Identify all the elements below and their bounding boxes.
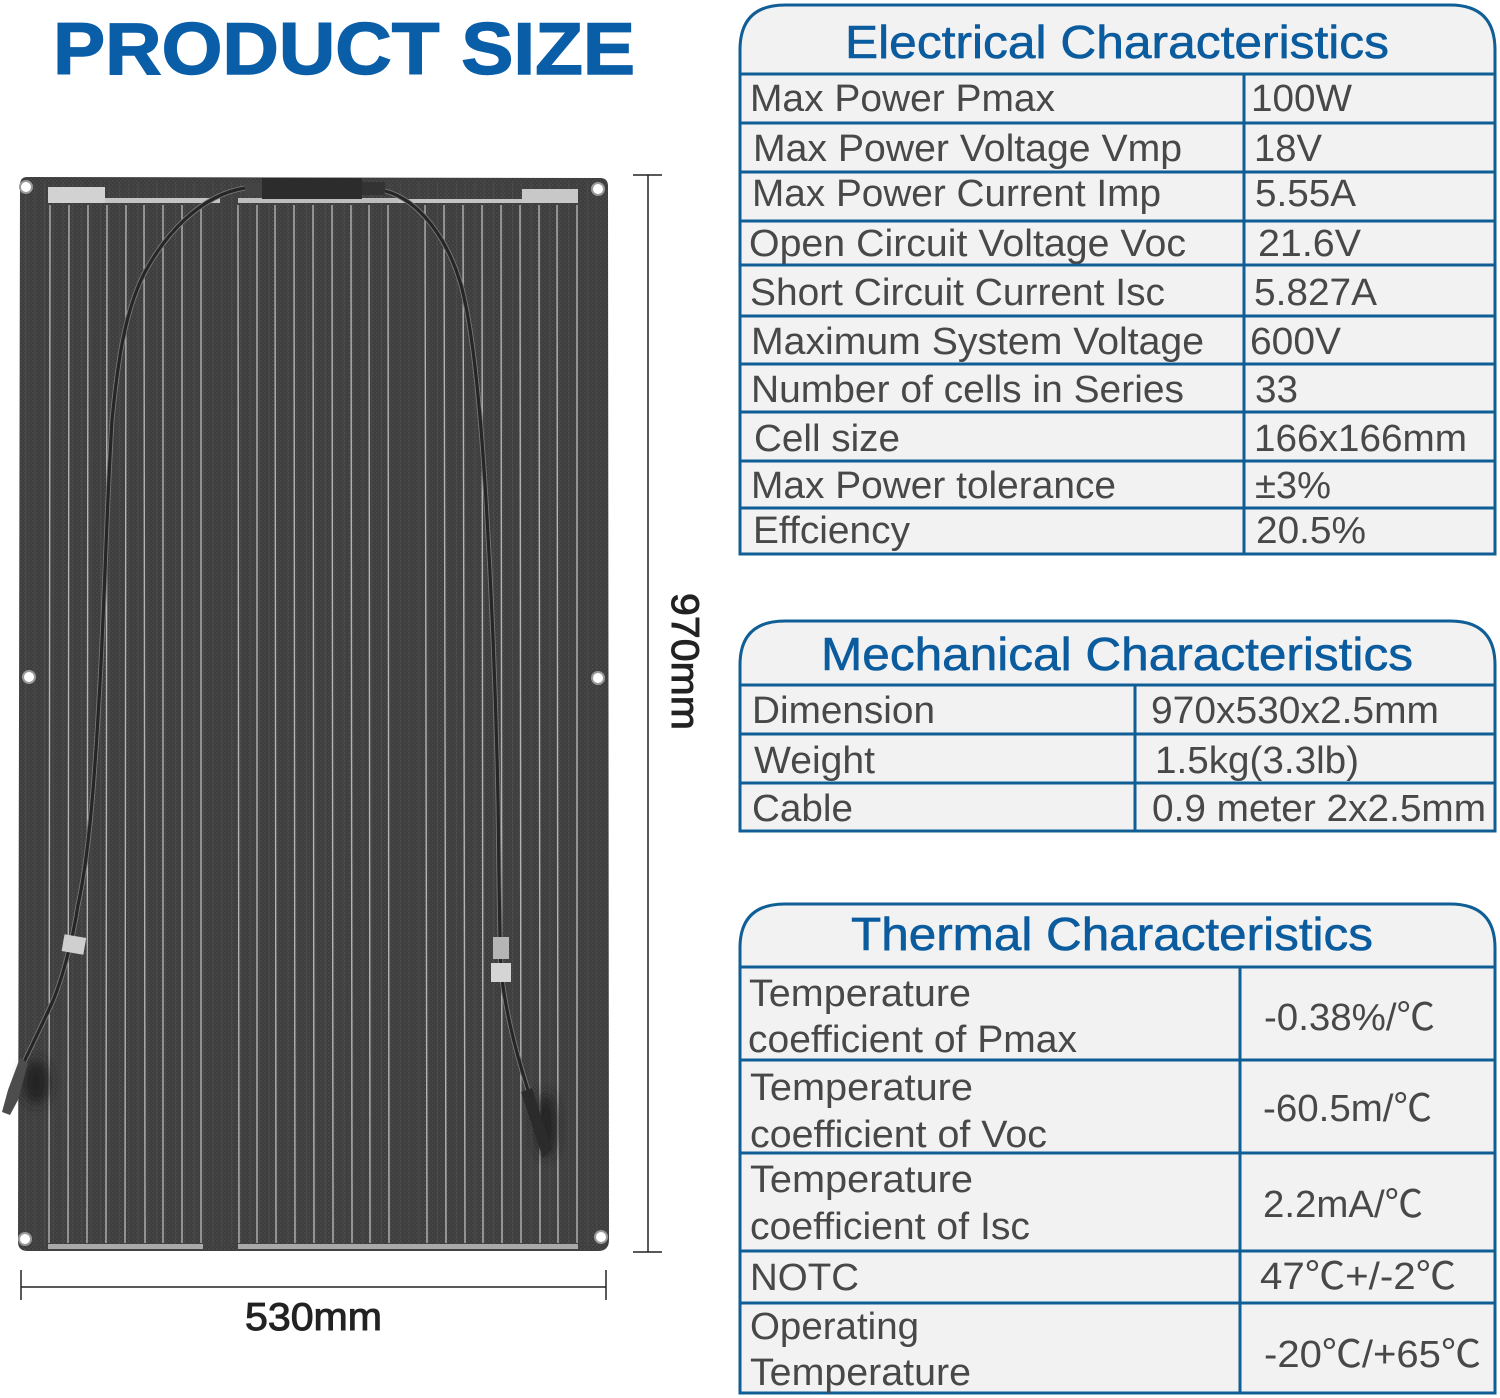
cell lines <box>49 205 577 1243</box>
rows: 600V <box>1250 321 1342 363</box>
rows: Weight <box>754 740 875 782</box>
panel: thermal characteristics <box>740 904 1495 1394</box>
rows: Max Power tolerance <box>751 465 1116 507</box>
rows: 33 <box>1255 369 1298 411</box>
connector shadows <box>23 1060 556 1157</box>
rows: Temperature <box>750 1067 973 1109</box>
rows: Operating <box>750 1306 919 1348</box>
rows: Temperature <box>750 1352 971 1394</box>
height dimension: 970mm <box>663 593 706 730</box>
mounting holes <box>19 181 607 1245</box>
rows: -60.5m/℃ <box>1263 1088 1432 1130</box>
rows: Max Power Current Imp <box>752 173 1161 215</box>
rows: Max Power Voltage Vmp <box>753 128 1182 170</box>
heading: Thermal Characteristics <box>851 908 1373 960</box>
rows: 47℃+/-2℃ <box>1260 1256 1456 1298</box>
rows: -0.38%/℃ <box>1264 997 1435 1039</box>
title: PRODUCT SIZE <box>53 9 635 90</box>
rows: 0.9 meter 2x2.5mm <box>1152 788 1486 830</box>
rows: coefficient of Pmax <box>748 1019 1077 1061</box>
rows <box>749 78 1467 552</box>
panel: electrical characteristics <box>740 5 1495 554</box>
rows: NOTC <box>750 1257 859 1299</box>
right connector <box>491 937 552 1158</box>
rows <box>748 973 1481 1394</box>
solar panel <box>2 177 609 1251</box>
rows: Number of cells in Series <box>751 369 1184 411</box>
cables <box>24 188 528 1090</box>
rows <box>752 690 1486 830</box>
rows: 1.5kg(3.3lb) <box>1155 740 1359 782</box>
fine cell stripes <box>24 182 604 1246</box>
junction box <box>245 178 385 199</box>
rows: Short Circuit Current Isc <box>750 272 1165 314</box>
width dimension: 530mm <box>245 1296 382 1339</box>
rows: coefficient of Voc <box>750 1114 1047 1156</box>
heading: Electrical Characteristics <box>845 16 1389 68</box>
rows: 5.827A <box>1254 272 1378 314</box>
rows: 18V <box>1254 128 1323 170</box>
left connector <box>2 934 86 1115</box>
rows: Open Circuit Voltage Voc <box>749 223 1186 265</box>
rows: 100W <box>1251 78 1352 120</box>
rows: coefficient of Isc <box>750 1206 1030 1248</box>
rows: -20℃/+65℃ <box>1264 1334 1481 1376</box>
rows: Maximum System Voltage <box>751 321 1204 363</box>
rows: Effciency <box>753 510 910 552</box>
panel: mechanical characteristics <box>740 621 1495 831</box>
rows: Max Power Pmax <box>750 78 1055 120</box>
rows: Cell size <box>754 418 900 460</box>
panel body <box>18 177 609 1251</box>
rows: Temperature <box>750 1159 973 1201</box>
rows: 5.55A <box>1255 173 1357 215</box>
rows: Dimension <box>752 690 935 732</box>
rows: Temperature <box>749 973 971 1015</box>
rows: 2.2mA/℃ <box>1263 1184 1423 1226</box>
rows: 21.6V <box>1258 223 1362 265</box>
rows: Cable <box>752 788 853 830</box>
rows: ±3% <box>1255 465 1331 507</box>
rows: 970x530x2.5mm <box>1151 690 1439 732</box>
heading: Mechanical Characteristics <box>821 628 1413 680</box>
busbars and labels <box>48 187 578 1249</box>
rows: 20.5% <box>1256 510 1366 552</box>
rows: 166x166mm <box>1254 418 1467 460</box>
